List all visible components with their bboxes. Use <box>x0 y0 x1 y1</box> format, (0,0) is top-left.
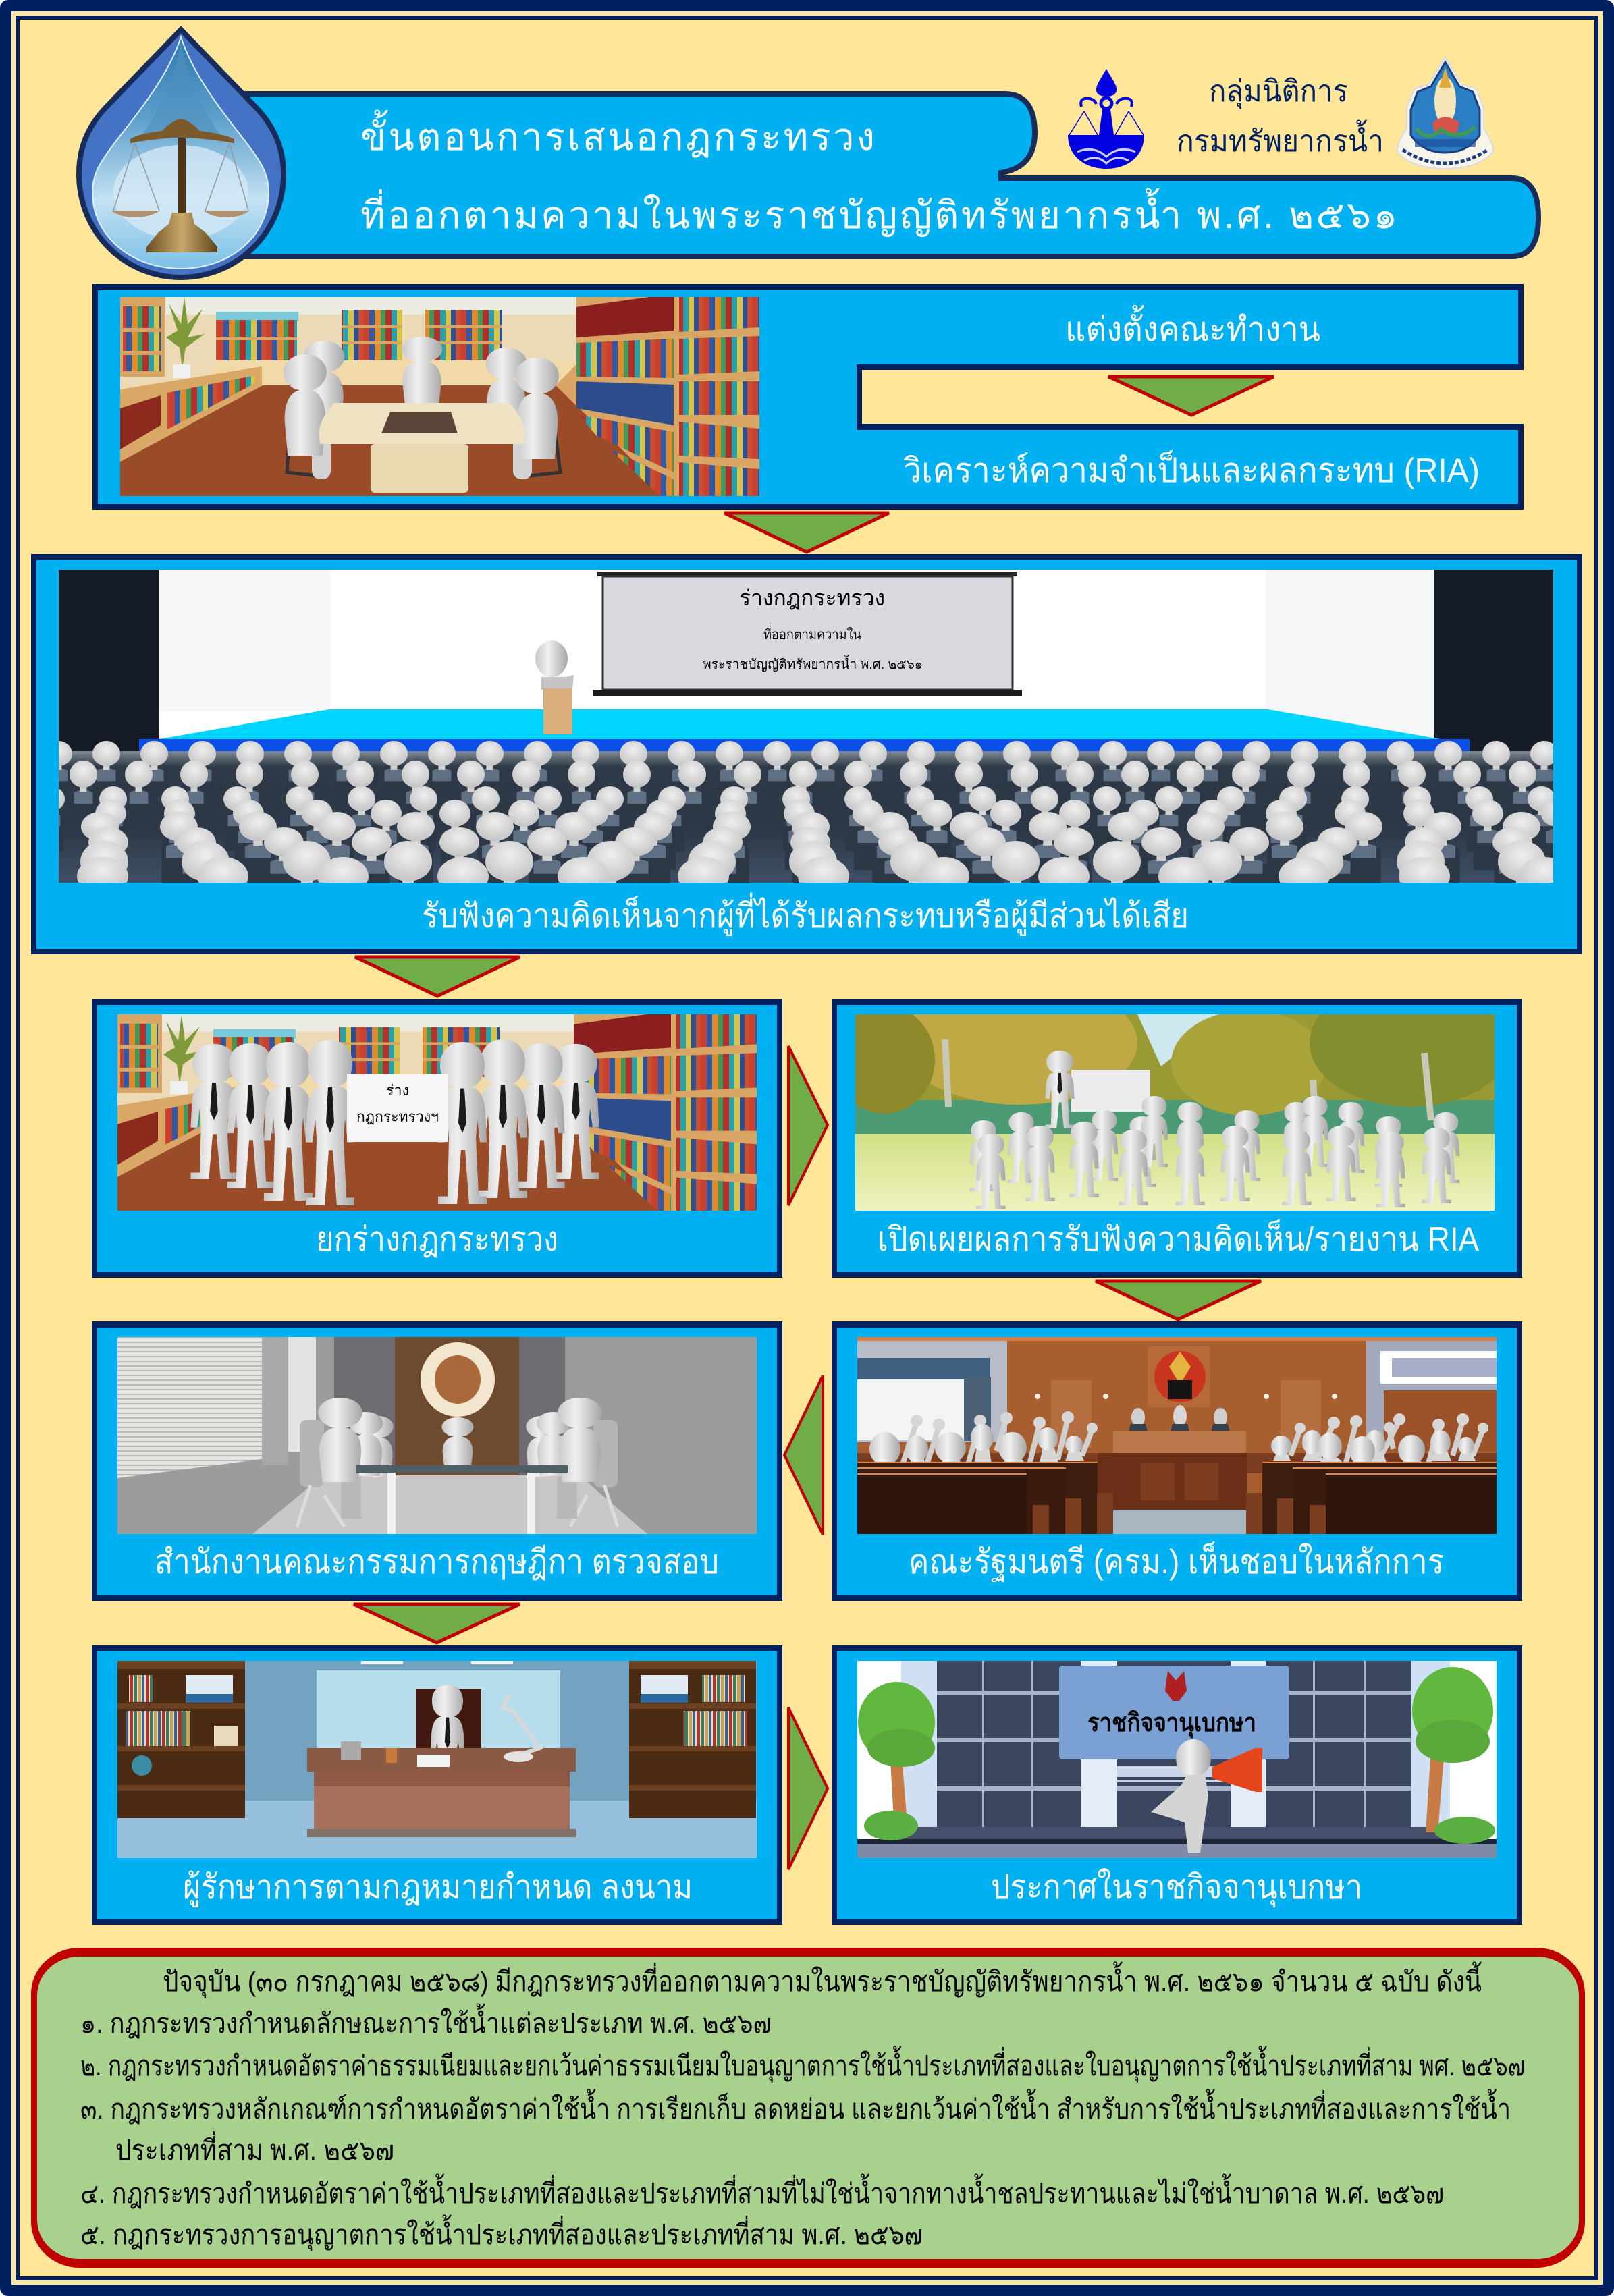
arrow: drafting to publication of results <box>788 1046 828 1205</box>
arrow: working group to RIA <box>1108 377 1274 415</box>
council of state emblem <box>421 1342 495 1417</box>
draft sign: กฎกระทรวงฯ <box>356 1108 439 1125</box>
pews <box>857 1462 1497 1534</box>
image: team holding draft <box>117 1011 757 1211</box>
image: office with desk <box>117 1661 757 1858</box>
caption: signing: ผู้รักษาการตามกฎหมายกำหนด ลงนาม <box>183 1868 693 1907</box>
panel: disclose hearing results <box>832 979 1522 1278</box>
desk <box>307 1694 576 1837</box>
panel: signing by minister <box>92 1645 782 1925</box>
icon: water drop with scales of justice <box>79 30 284 277</box>
organisation name: กลุ่มนิติการ <box>1209 75 1348 109</box>
judges <box>1129 1405 1230 1431</box>
image: council of state meeting room <box>117 1337 757 1534</box>
caption: cabinet: คณะรัฐมนตรี (ครม.) เห็นชอบในหลักการ <box>909 1541 1444 1582</box>
title line 2: ที่ออกตามความในพระราชบัญญัติทรัพยากรน้ำ พ.ศ. ๒๕๖๑ <box>360 188 1397 237</box>
caption: appoint working group: แต่งตั้งคณะทำงาน <box>1065 305 1320 348</box>
speaker at podium <box>535 640 574 734</box>
left tree <box>858 1682 935 1840</box>
intro text: ปัจจุบัน (๓๐ กรกฎาคม ๒๕๖๘) มีกฎกระทรวงที่ออกตามความในพระราชบัญญัติทรัพยากรน้ำ พ.ศ. ๒๕๖๑ จำนวน ๕ ฉบับ ดังนี้ <box>163 1961 1482 1998</box>
right bookshelf <box>629 1661 756 1818</box>
image: presentation in park <box>855 1014 1495 1211</box>
list item 1: ๑. กฎกระทรวงกำหนดลักษณะการใช้น้ำแต่ละประเภท พ.ศ. ๒๕๖๗ <box>80 2003 772 2039</box>
raised hands audience <box>869 1411 1488 1473</box>
right wall with picture <box>1366 1341 1497 1451</box>
list item 5: ๕. กฎกระทรวงการอนุญาตการใช้น้ำประเภทที่สองและประเภทที่สาม พ.ศ. ๒๕๖๗ <box>80 2214 923 2251</box>
gazette sign <box>1059 1666 1289 1759</box>
draft sign <box>347 1074 448 1142</box>
image: gazette building <box>857 1661 1497 1858</box>
panel: cabinet approval <box>832 1321 1522 1601</box>
panel: current regulations list <box>31 1948 1585 2268</box>
caption: RIA: วิเคราะห์ความจำเป็นและผลกระทบ (RIA) <box>903 450 1480 489</box>
icon: department of water resources emblem <box>1397 57 1493 169</box>
image: meeting in library <box>120 294 759 496</box>
projection screen: ร่างกฎกระทรวง <box>739 585 885 610</box>
caption: gazette: ประกาศในราชกิจจานุเบกษา <box>991 1868 1362 1907</box>
list item 4: ๔. กฎกระทรวงกำหนดอัตราค่าใช้น้ำประเภทที่สองและประเภทที่สามที่ไม่ใช่น้ำจากทางน้ำชลประทานและไม่ใช่น้ำบาดาล พ.ศ. ๒๕๖๗ <box>80 2173 1444 2209</box>
panel: council of state review <box>92 1321 782 1601</box>
national emblem <box>1148 1346 1210 1407</box>
herald figure with megaphone <box>1151 1739 1262 1853</box>
organisation name: กรมทรัพยากรน้ำ <box>1177 119 1384 158</box>
arrow: down to drafting <box>355 957 520 996</box>
minister figure <box>431 1685 464 1799</box>
list item 3: ประเภทที่สาม พ.ศ. ๒๕๖๗ <box>115 2131 394 2166</box>
projection screen <box>593 572 1022 696</box>
draft sign: ร่าง <box>386 1082 409 1099</box>
panel: public hearing <box>31 554 1582 954</box>
arrow: cabinet to council of state <box>784 1375 823 1535</box>
left bookshelf <box>117 1661 245 1818</box>
audience <box>59 741 1553 883</box>
seated figures <box>318 1398 602 1519</box>
caption: council of state: สำนักงานคณะกรรมการกฤษฎีกา ตรวจสอบ <box>155 1543 719 1581</box>
arrow: signing to gazette <box>788 1707 828 1869</box>
right tree <box>1412 1667 1495 1844</box>
icon: legal group logo <box>1068 69 1144 169</box>
image: auditorium with audience <box>59 570 1553 883</box>
panel: publication in gazette <box>832 1645 1522 1925</box>
list item 3 <box>80 2089 1511 2166</box>
panel: working group and RIA <box>92 284 1524 510</box>
projection screen: ที่ออกตามความใน <box>763 625 861 643</box>
crowd front row <box>976 1122 1451 1209</box>
caption: public hearing: รับฟังความคิดเห็นจากผู้ที่ได้รับผลกระทบหรือผู้มีส่วนได้เสีย <box>422 893 1189 936</box>
chairs <box>297 1420 618 1527</box>
gazette sign: ราชกิจจานุเบกษา <box>1087 1709 1256 1739</box>
crowd back row <box>970 1096 1459 1191</box>
caption: drafting: ยกร่างกฎกระทรวง <box>316 1220 558 1258</box>
arrow: down to public hearing <box>724 513 889 552</box>
arrow: down to cabinet <box>1096 1281 1261 1319</box>
title line 1: ขั้นตอนการเสนอกฎกระทรวง <box>360 110 875 158</box>
window and curtains <box>857 1341 1007 1442</box>
title banner <box>230 94 1538 256</box>
panel: drafting ministerial regulation <box>92 999 782 1278</box>
projection screen: พระราชบัญญัติทรัพยากรน้ำ พ.ศ. ๒๕๖๑ <box>703 655 923 672</box>
caption: disclose results: เปิดเผยผลการรับฟังความคิดเห็น/รายงาน RIA <box>878 1219 1480 1258</box>
organisation name <box>1177 75 1384 158</box>
arrow: down to signing <box>354 1604 520 1643</box>
image: parliament chamber <box>857 1337 1497 1534</box>
